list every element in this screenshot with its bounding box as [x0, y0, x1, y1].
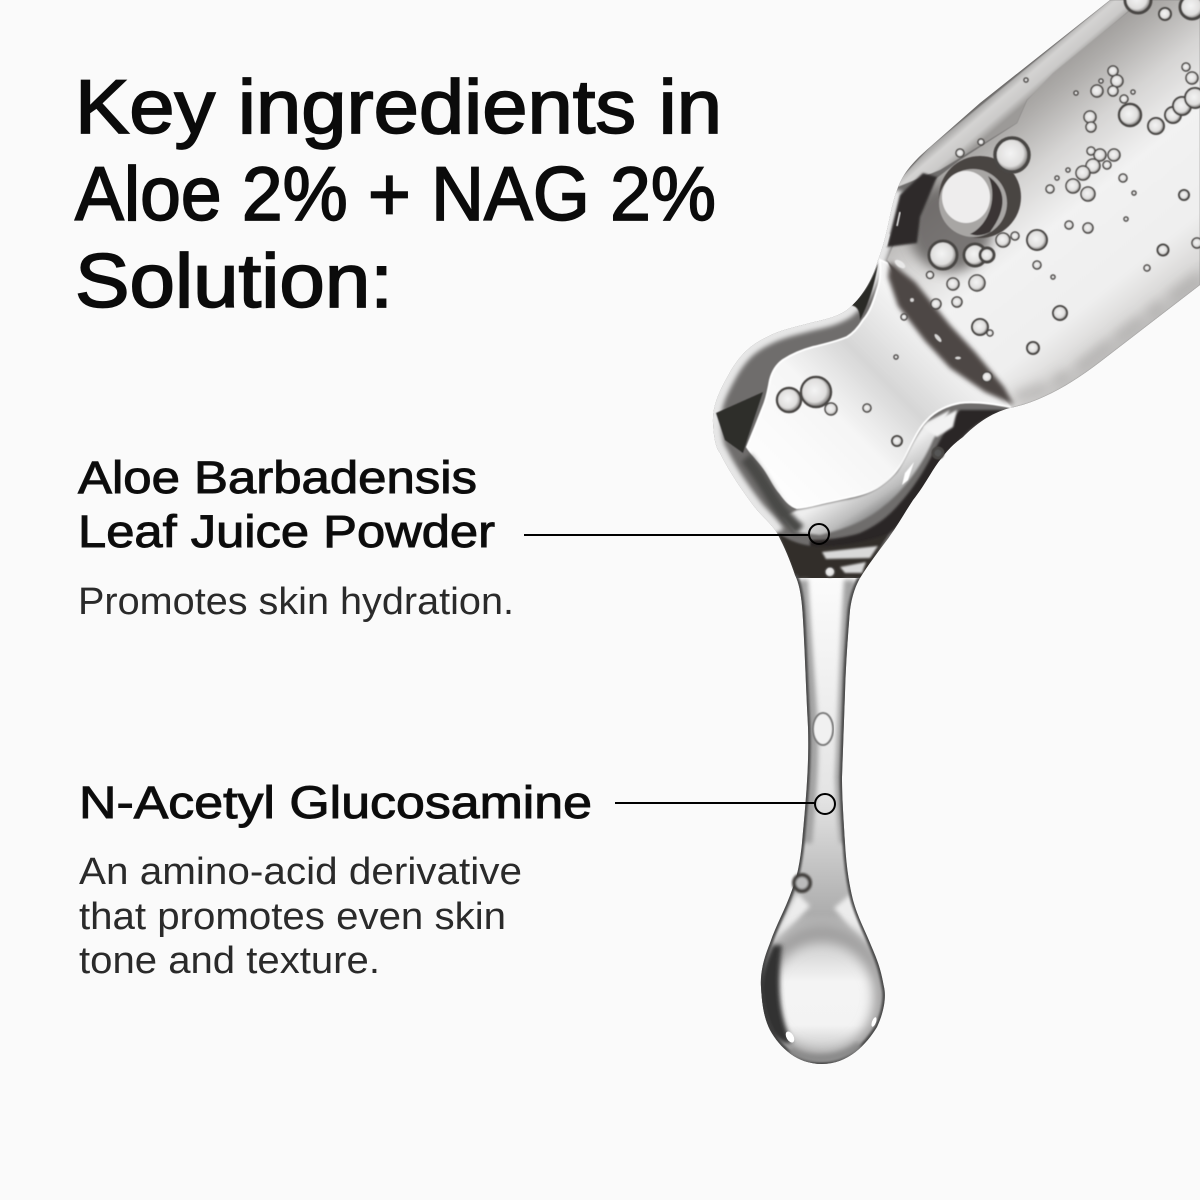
ingredient 1 heading: Leaf Juice Powder [78, 506, 495, 557]
dark liquid meniscus band [888, 262, 1014, 405]
thread dark outline [761, 575, 885, 1064]
title: Aloe 2% + NAG 2% [75, 152, 716, 237]
drop glints [786, 1032, 794, 1042]
crescent highlight [923, 410, 957, 437]
large bubble [939, 156, 1021, 238]
ingredient 1 heading [78, 452, 495, 557]
crescent glint [902, 462, 914, 485]
title [75, 65, 722, 324]
soft shadow around large bubble [908, 184, 992, 272]
right wedge highlight in drop [833, 894, 866, 942]
ingredient 2 description: that promotes even skin [79, 896, 506, 938]
small bubbles [777, 0, 1200, 577]
shoulder glint streaks [886, 212, 900, 246]
lower left bulb shadow [746, 458, 800, 530]
clipped dropper body [700, 0, 1200, 1068]
lit bulb edge [713, 190, 897, 533]
dark collar at neck [778, 533, 888, 584]
thread bubble [813, 713, 833, 745]
ingredient 2 description: tone and texture. [79, 940, 380, 982]
ingredient 2 heading: N-Acetyl Glucosamine [79, 777, 592, 828]
drop left dark edge [760, 945, 792, 1043]
ingredient 2 callout line [615, 794, 835, 814]
ingredient 1 callout line [524, 524, 829, 544]
drop right glint [872, 1017, 876, 1027]
lower bulb dark crescent [810, 410, 1007, 560]
title: Solution: [75, 239, 393, 324]
title: Key ingredients in [75, 65, 722, 150]
dropper with serum drop [700, 0, 1200, 1068]
collar highlights [822, 546, 878, 573]
left bulb reflection [716, 392, 763, 453]
bulb clear interior [747, 260, 1010, 508]
tube lower edge mottling [1015, 277, 1200, 398]
ingredient 1 description: Promotes skin hydration. [78, 581, 514, 623]
tube rim [898, 0, 1129, 188]
lower bulb soft band [783, 410, 950, 535]
dark shoulder shadow [887, 173, 937, 247]
drop edge shading [762, 933, 882, 1061]
liquid in tube [887, 0, 1200, 408]
dark neck sliver [850, 263, 878, 320]
band specks [893, 258, 961, 360]
left wedge highlight in drop [776, 893, 811, 940]
thread soft inner edges [802, 580, 850, 843]
ingredient 2 description [79, 851, 522, 982]
drop bottom shadow [790, 1045, 860, 1058]
ingredient 2 description: An amino-acid derivative [79, 851, 522, 893]
base body tone [700, 0, 1200, 600]
bubble in drop neck [794, 875, 810, 891]
ingredient 1 heading: Aloe Barbadensis [78, 452, 477, 503]
thread and drop fill [768, 578, 870, 1064]
